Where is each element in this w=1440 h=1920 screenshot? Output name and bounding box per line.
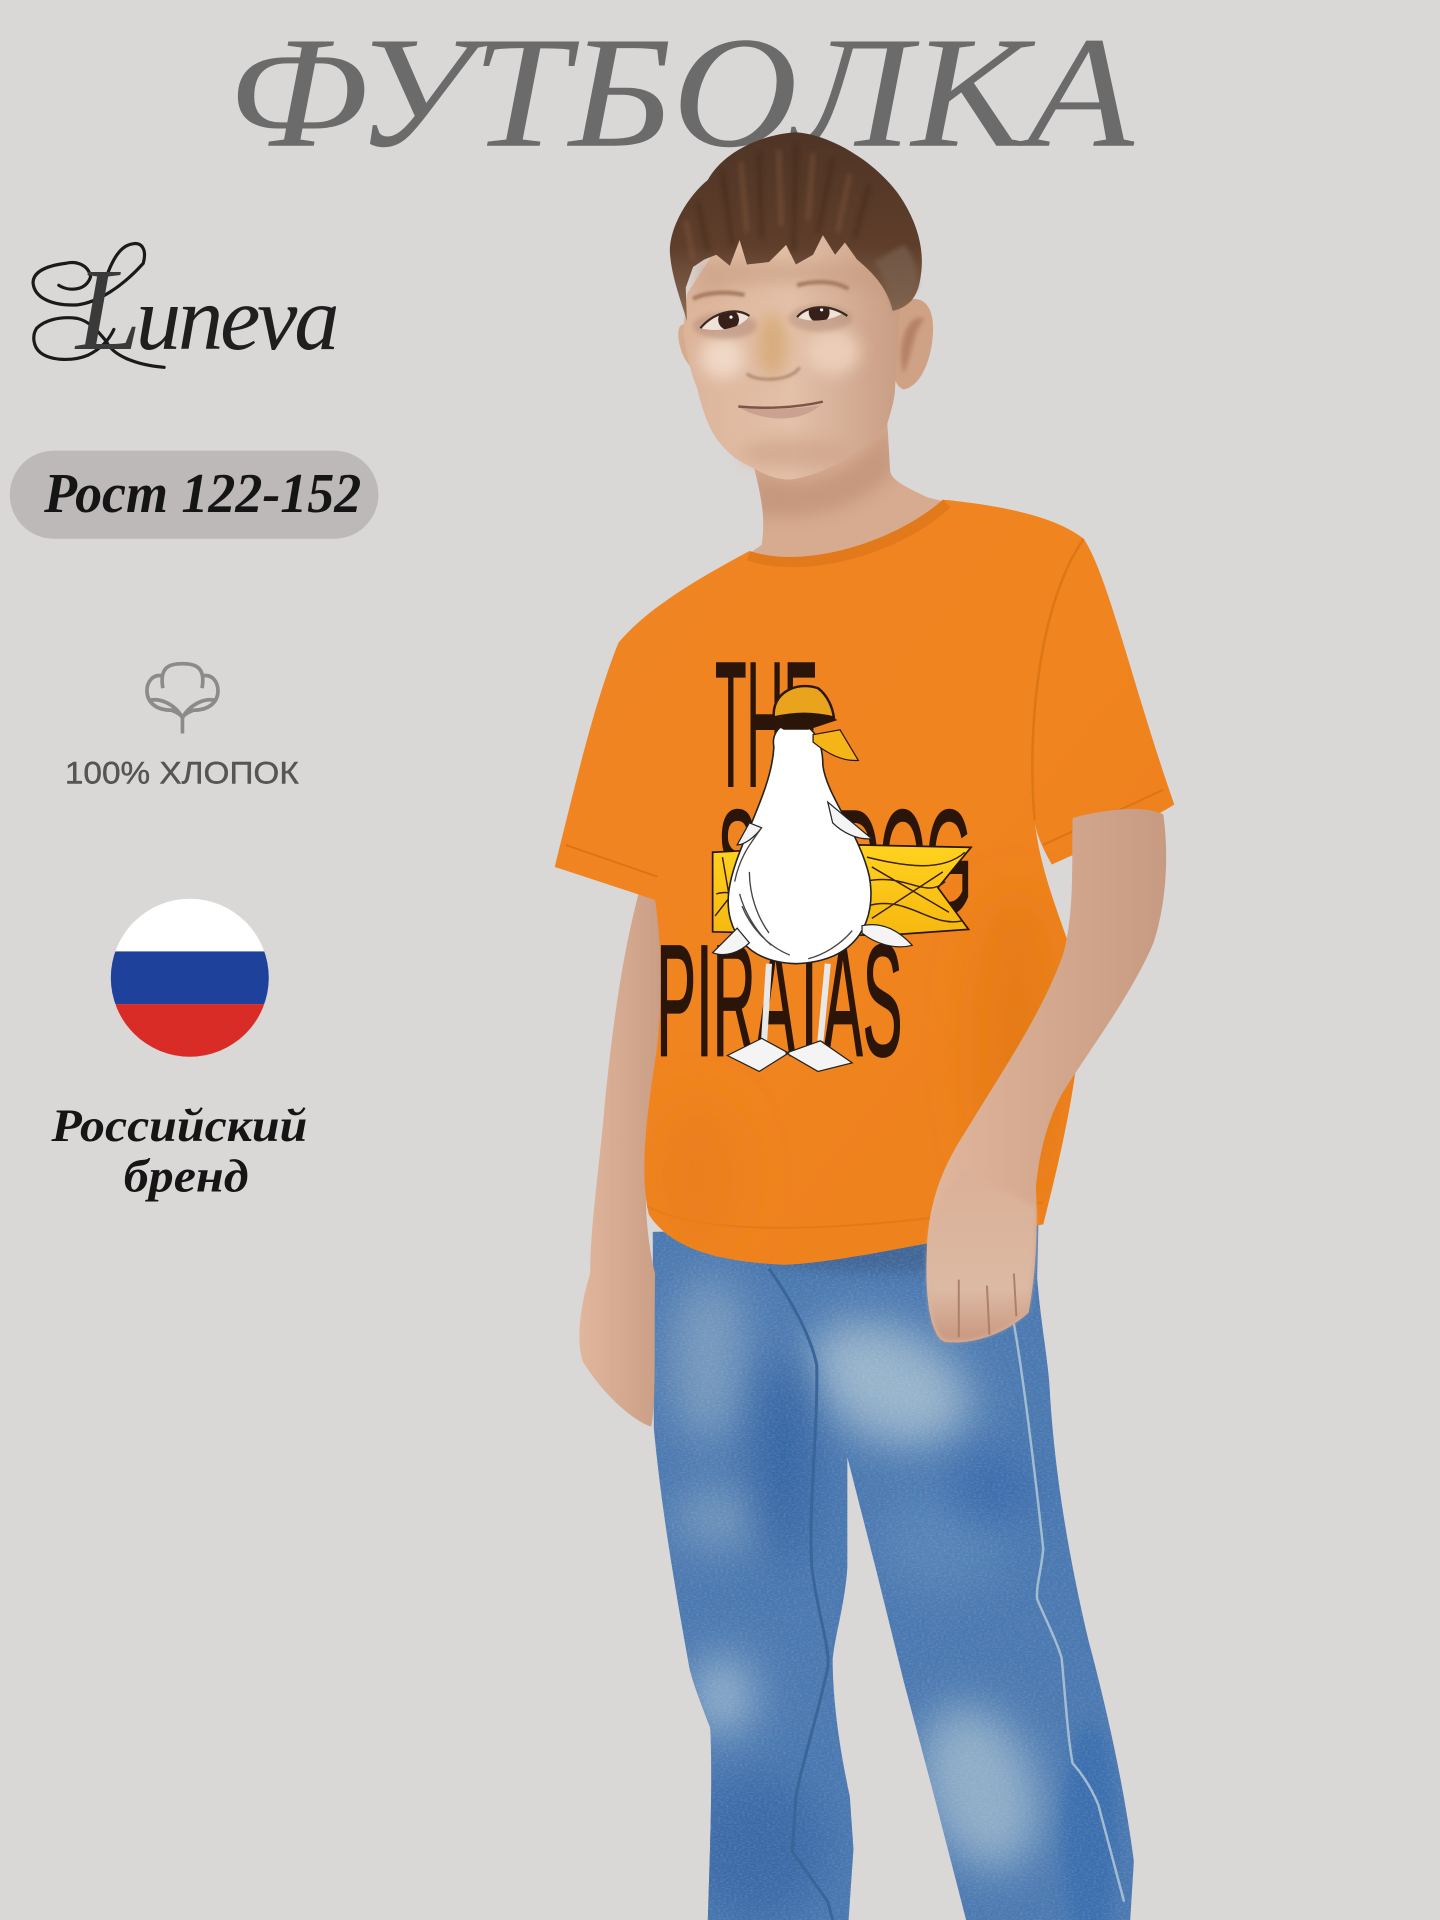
seagull legs and feet	[764, 964, 828, 1041]
seagull body	[728, 722, 871, 964]
model: boy	[539, 132, 1188, 1920]
brand origin text: Российский	[50, 1101, 307, 1152]
brand origin text: бренд	[124, 1151, 249, 1202]
left arm and hand	[579, 891, 671, 1427]
seagull hat and beak	[774, 686, 834, 718]
brand logo: Luneva	[33, 244, 336, 375]
icon: russian flag	[110, 898, 269, 1058]
right arm and hand	[926, 809, 1166, 1342]
surfboard	[713, 845, 971, 936]
hair	[670, 132, 922, 321]
shirt lettering	[656, 624, 972, 1090]
shirt graphic	[656, 624, 972, 1090]
right hand fingers	[928, 1169, 1035, 1341]
height badge	[10, 451, 378, 539]
icon: cotton boll	[147, 664, 218, 733]
material label: 100% ХЛОПОК	[65, 755, 299, 791]
brand logo: Luneva: uneva	[136, 268, 336, 369]
brand origin text	[50, 1101, 307, 1202]
shirt lettering: THE	[715, 624, 818, 824]
left ear	[678, 324, 696, 372]
mouth	[738, 402, 823, 418]
shirt	[539, 490, 1188, 1286]
face	[683, 220, 900, 480]
right ear	[894, 299, 933, 389]
title: ФУТБОЛКА	[228, 5, 1135, 181]
eyes and brows	[693, 282, 852, 339]
neck	[749, 410, 945, 560]
jeans	[637, 1212, 1151, 1920]
model: boy: PIRATAS	[656, 912, 902, 1090]
nose	[747, 367, 800, 379]
brand logo: Luneva: L	[74, 245, 141, 375]
height badge: Рост 122-152	[43, 463, 361, 525]
model: boy: SEADOG	[718, 780, 972, 944]
